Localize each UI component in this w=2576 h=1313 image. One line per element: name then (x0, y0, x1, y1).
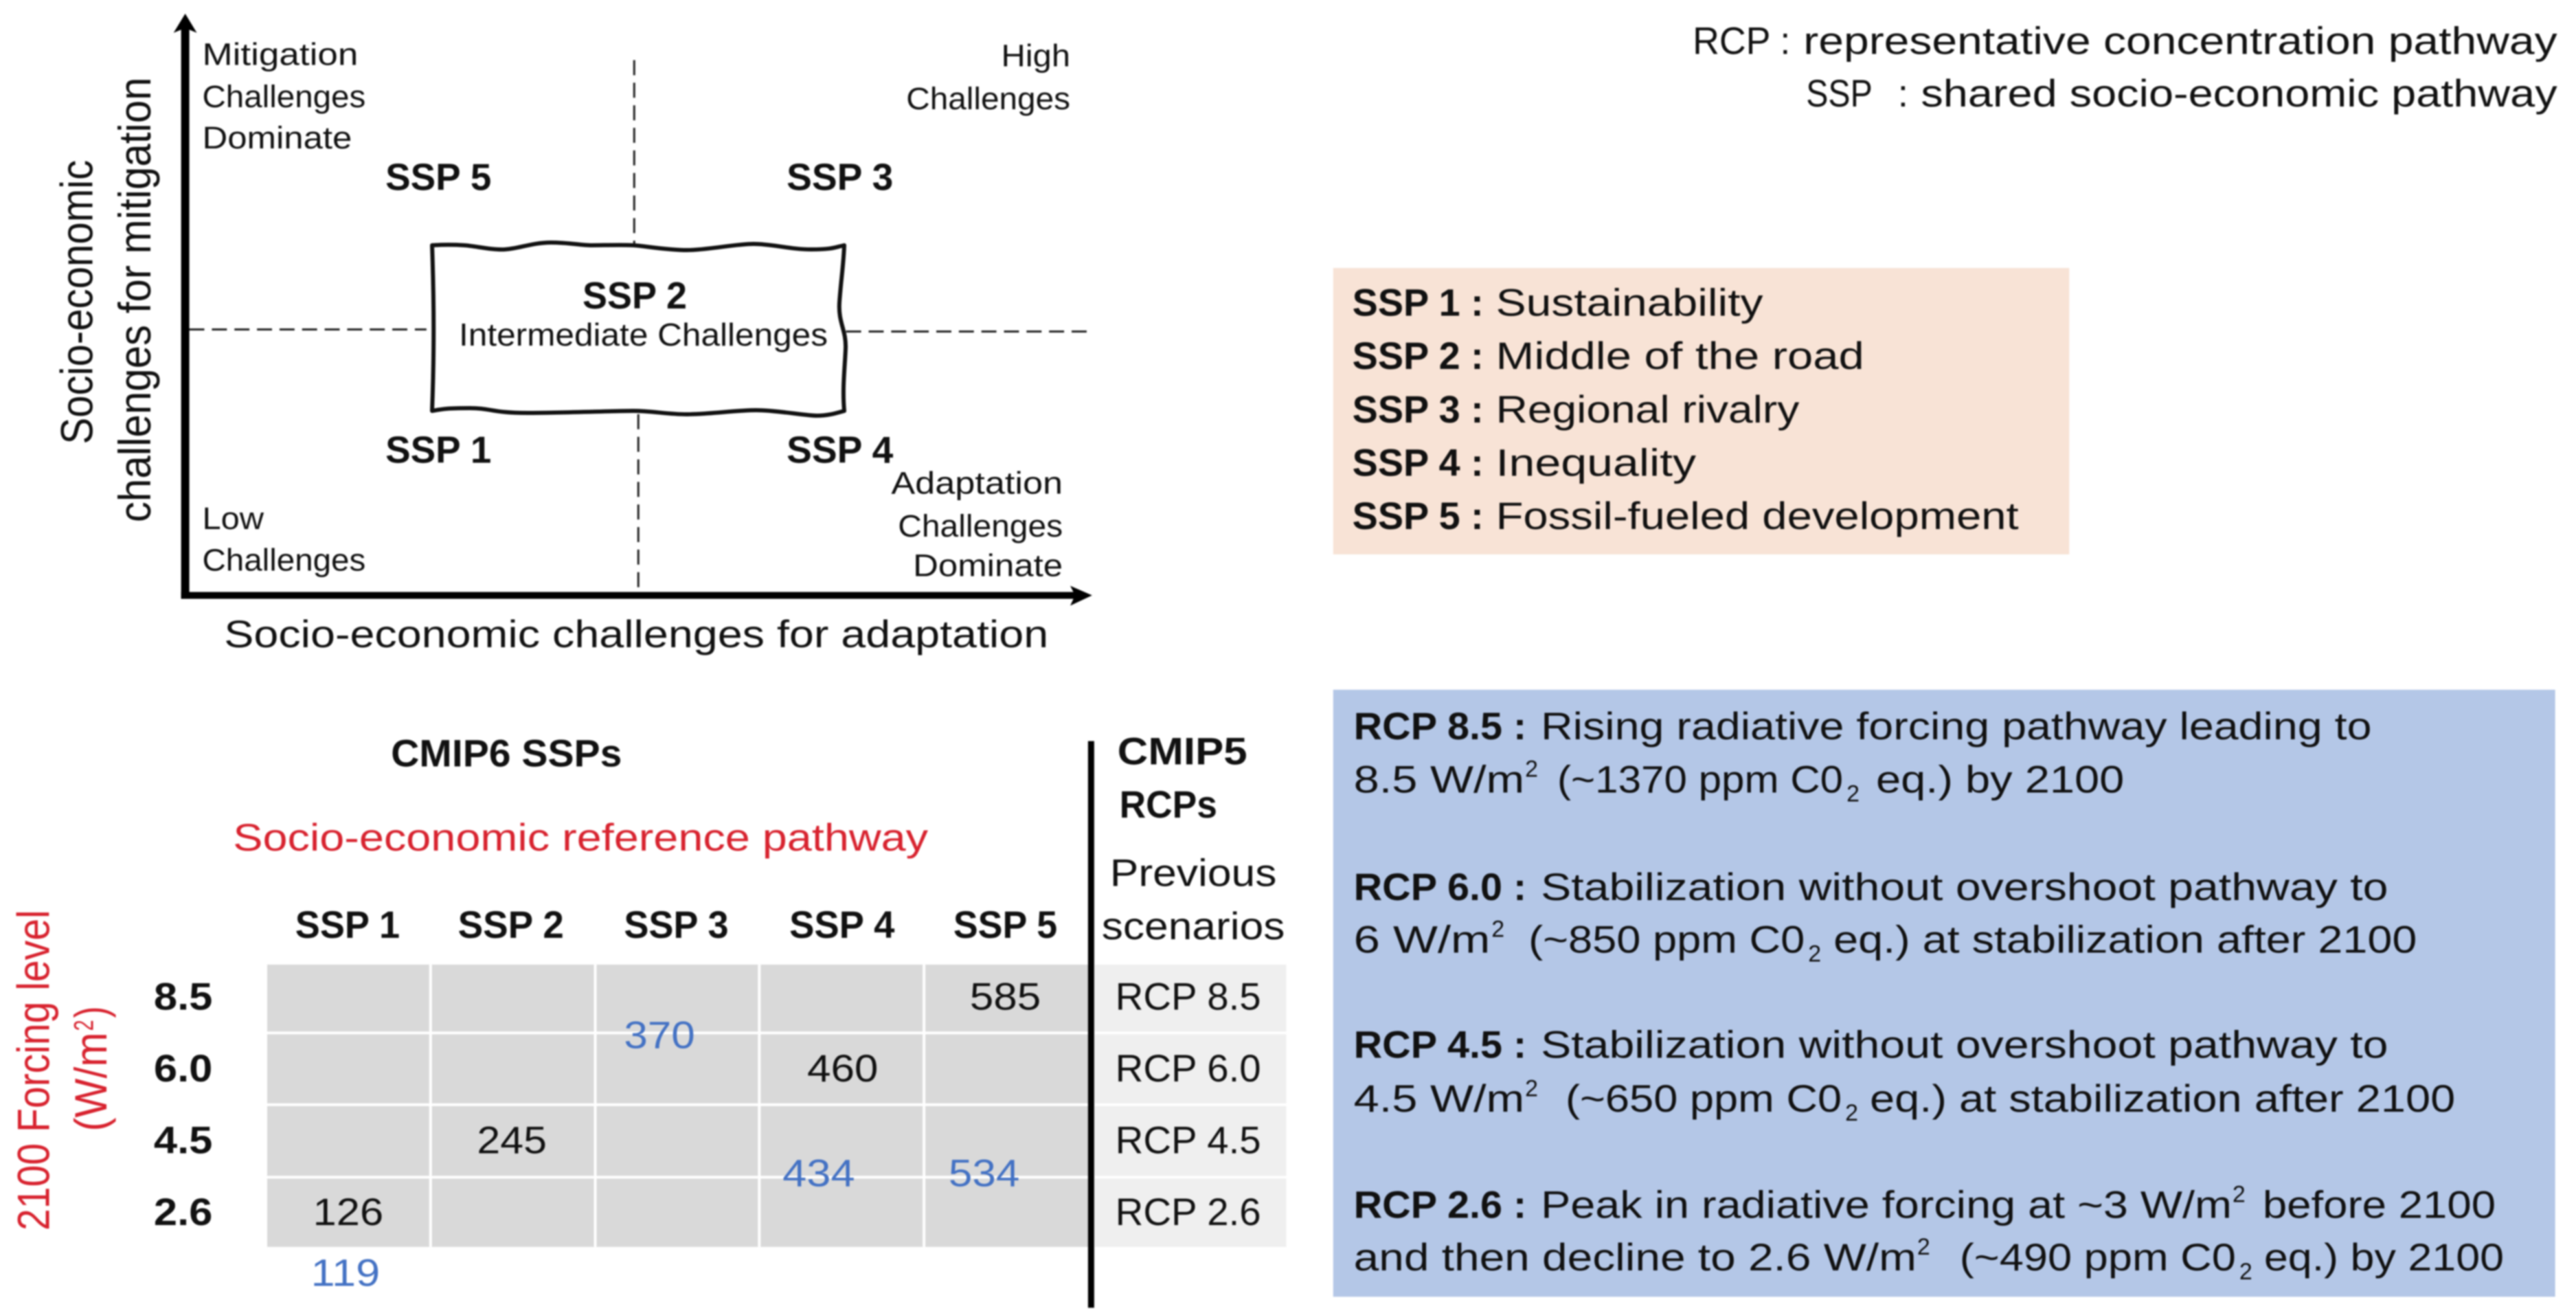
subheading: previous scenarios: Previous (1110, 852, 1276, 895)
RCP 8.5 definition: RCP 8.5 : (1354, 704, 1526, 748)
RCP 4.5 definition: eq.) at stabilization after 2100 (1870, 1077, 2455, 1120)
RCP 4.5 definition (1354, 1023, 2455, 1126)
SSP 4 definition: Inequality (1496, 441, 1696, 484)
RCP 2.6 definition: (~490 ppm C0 (1960, 1235, 2236, 1279)
RCP 4.5 definition: 4.5 W/m (1354, 1077, 1524, 1120)
subheading: socio-economic reference pathway: Socio-economic reference pathway (233, 816, 928, 859)
SSP 4 definition (1353, 441, 1696, 484)
RCP 6.0 definition: Stabilization without overshoot pathway to (1541, 865, 2388, 908)
column headers: SSP 4 (789, 904, 894, 946)
axis label: 2100 forcing level (9, 910, 116, 1231)
row headers: 2.6 (154, 1191, 212, 1233)
matrix values: 126 (313, 1191, 383, 1233)
RCP 2.6 definition: eq.) by 2100 (2264, 1235, 2504, 1279)
corner label: mitigation challenges dominate: Dominate (202, 120, 352, 155)
RCP 8.5 definition: eq.) by 2100 (1876, 758, 2124, 801)
row headers (154, 976, 212, 1233)
RCP 6.0 definition (1354, 865, 2417, 967)
SSP 2 definition: SSP 2 : (1353, 335, 1484, 377)
RCP 2.6 definition: and then decline to 2.6 W/m (1354, 1235, 1917, 1279)
RCP 6.0 definition: 2 (1491, 917, 1504, 943)
SSP 5 definition: Fossil-fueled development (1496, 495, 2019, 537)
y axis label: challenges for mitigation (110, 77, 160, 522)
RCP 2.6 definition: Peak in radiative forcing at ~3 W/m (1541, 1183, 2232, 1226)
RCP 2.6 definition: 2 (1917, 1234, 1930, 1260)
matrix values: 434 (782, 1152, 855, 1194)
corner label: adaptation challenges dominate: Challenges (898, 508, 1063, 543)
y axis label: Socio-economic (52, 160, 102, 445)
matrix grid (267, 965, 1286, 1247)
RCP 2.6 definition: 2 (2239, 1259, 2252, 1285)
legend: acronym definitions (1693, 20, 2557, 115)
heading: CMIP5 RCPs (1118, 730, 1247, 826)
RCP 8.5 definition: 2 (1846, 781, 1860, 807)
SSP 4 definition: SSP 4 : (1353, 441, 1484, 484)
subheading: previous scenarios (1102, 852, 1285, 947)
axis label: 2100 forcing level: ) (66, 1007, 116, 1018)
y axis arrow (174, 14, 197, 599)
legend: acronym definitions: representative concentration pathway (1803, 20, 2557, 63)
corner label: adaptation challenges dominate (891, 465, 1063, 583)
RCP 8.5 definition: (~1370 ppm C0 (1557, 758, 1843, 801)
heading: CMIP5 RCPs: CMIP5 (1118, 730, 1247, 772)
matrix values: 245 (477, 1119, 547, 1162)
corner label: adaptation challenges dominate: Adaptation (891, 465, 1063, 500)
previous RCP labels: RCP 4.5 (1116, 1119, 1261, 1162)
matrix values: 119 (311, 1252, 380, 1294)
RCP 2.6 definition: 2 (2233, 1182, 2246, 1208)
RCP 8.5 definition: Rising radiative forcing pathway leading to (1541, 704, 2372, 748)
previous RCP labels: RCP 8.5 (1116, 976, 1261, 1018)
heading: CMIP5 RCPs: RCPs (1120, 783, 1217, 826)
wavy box: SSP 2 intermediate challenges: Intermediate Challenges (459, 317, 828, 352)
corner label: mitigation challenges dominate: Mitigation (202, 37, 358, 72)
wavy box: SSP 2 intermediate challenges: SSP 2 (583, 274, 687, 317)
row headers: 4.5 (154, 1119, 212, 1162)
matrix values: 370 (624, 1013, 695, 1056)
SSP 5 definition: SSP 5 : (1353, 495, 1484, 537)
axis label: 2100 forcing level: 2100 Forcing level (9, 910, 59, 1231)
legend: acronym definitions: RCP : (1693, 20, 1790, 63)
matrix values (311, 976, 1041, 1294)
corner label: high challenges (906, 38, 1070, 116)
RCP 8.5 definition (1354, 704, 2371, 807)
label SSP 3: SSP 3 (787, 156, 893, 199)
RCP 6.0 definition: (~850 ppm C0 (1528, 917, 1805, 961)
RCP 6.0 definition: 6 W/m (1354, 917, 1490, 961)
corner label: low challenges (202, 501, 365, 578)
RCP 4.5 definition: 2 (1845, 1100, 1858, 1126)
matrix values: 460 (807, 1047, 878, 1090)
row headers: 8.5 (154, 976, 212, 1018)
panel: SSP challenges quadrant diagram (52, 14, 1092, 655)
corner label: high challenges: Challenges (906, 81, 1070, 116)
row headers: 6.0 (154, 1047, 212, 1090)
SSP 3 definition: Regional rivalry (1496, 388, 1799, 431)
corner label: mitigation challenges dominate (202, 37, 365, 155)
x axis arrow (181, 586, 1092, 605)
matrix values: 534 (949, 1152, 1019, 1194)
RCP 6.0 definition: RCP 6.0 : (1354, 865, 1526, 908)
panel: scenario matrix (9, 730, 1286, 1308)
RCP 6.0 definition: eq.) at stabilization after 2100 (1833, 917, 2417, 961)
previous RCP labels: RCP 2.6 (1116, 1191, 1261, 1233)
column headers: SSP 2 (458, 904, 564, 946)
RCP 4.5 definition: Stabilization without overshoot pathway to (1541, 1023, 2388, 1066)
SSP 2 definition: Middle of the road (1496, 335, 1864, 377)
SSP 5 definition (1353, 495, 2019, 537)
panel: RCP definitions (1333, 690, 2555, 1297)
label SSP 5: SSP 5 (385, 156, 491, 199)
label SSP 4: SSP 4 (787, 429, 894, 471)
corner label: high challenges: High (1002, 38, 1070, 74)
label SSP 1: SSP 1 (385, 429, 491, 471)
column headers (295, 904, 1057, 946)
x axis label: Socio-economic challenges for adaptation (224, 613, 1048, 655)
RCP 4.5 definition: 2 (1525, 1075, 1538, 1101)
RCP 2.6 definition (1354, 1182, 2504, 1285)
RCP 4.5 definition: (~650 ppm C0 (1566, 1077, 1842, 1120)
RCP 4.5 definition: RCP 4.5 : (1354, 1023, 1526, 1066)
RCP 2.6 definition: before 2100 (2263, 1183, 2496, 1226)
RCP 8.5 definition: 8.5 W/m (1354, 758, 1524, 801)
corner label: low challenges: Low (202, 501, 264, 536)
axis label: 2100 forcing level: (W/m (66, 1032, 116, 1132)
corner label: mitigation challenges dominate: Challenges (202, 79, 365, 114)
previous RCP labels: RCP 6.0 (1116, 1047, 1261, 1090)
RCP 2.6 definition: RCP 2.6 : (1354, 1183, 1526, 1226)
SSP 1 definition (1353, 282, 1763, 324)
heading: CMIP6 SSPs: CMIP6 SSPs (391, 732, 622, 774)
RCP 8.5 definition: 2 (1525, 756, 1538, 783)
SSP 1 definition: SSP 1 : (1353, 282, 1484, 324)
matrix values: 585 (970, 976, 1041, 1018)
SSP 3 definition (1353, 388, 1799, 431)
column headers: SSP 5 (953, 904, 1057, 946)
legend: acronym definitions: SSP (1806, 72, 1873, 115)
y axis label (52, 77, 160, 522)
column headers: SSP 3 (624, 904, 729, 946)
corner label: adaptation challenges dominate: Dominate (913, 548, 1063, 583)
SSP 2 definition (1353, 335, 1864, 377)
panel: SSP definitions (1333, 268, 2069, 554)
SSP 3 definition: SSP 3 : (1353, 388, 1484, 431)
corner label: low challenges: Challenges (202, 543, 365, 578)
previous RCP labels (1116, 976, 1261, 1233)
legend: acronym definitions: shared socio-economic pathway (1921, 72, 2557, 115)
RCP 6.0 definition: 2 (1808, 941, 1821, 967)
axis label: 2100 forcing level: 2 (69, 1020, 99, 1031)
SSP 1 definition: Sustainability (1496, 282, 1763, 324)
vertical divider between CMIP6 and CMIP5 (1088, 741, 1094, 1308)
wavy box: SSP 2 intermediate challenges (432, 243, 846, 416)
column headers: SSP 1 (295, 904, 400, 946)
subheading: previous scenarios: scenarios (1102, 905, 1285, 947)
legend: acronym definitions: : (1898, 72, 1908, 115)
